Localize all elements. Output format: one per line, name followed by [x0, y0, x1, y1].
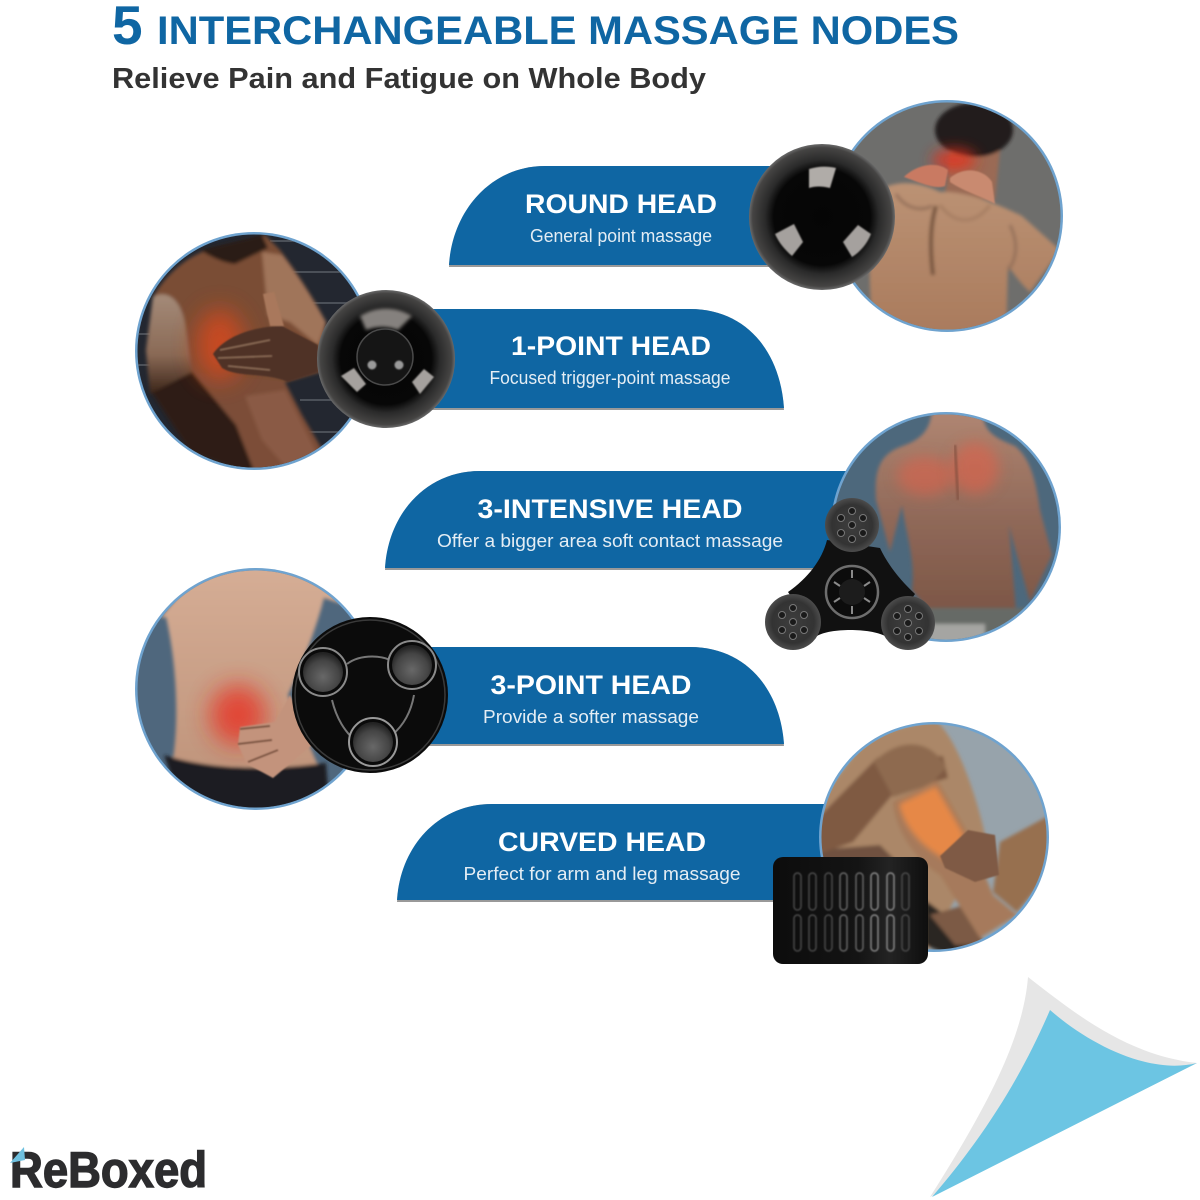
panel: 3-point head banner: 3-POINT HEAD: [490, 670, 692, 700]
top knob: [825, 498, 879, 552]
corner page curl: [930, 977, 1197, 1197]
logo: ReBoxed: [10, 1142, 207, 1198]
panel: 1-point head banner: 1-POINT HEAD: [511, 331, 711, 361]
photo: upper back pain: [828, 410, 1064, 648]
panel: 3-intensive head banner: Offer a bigger area soft contact massage: [437, 531, 783, 551]
panel: curved head banner: Perfect for arm and leg massage: [464, 864, 740, 884]
panel: 1-point head banner: Focused trigger-point massage: [490, 368, 730, 388]
icon: round massage head: [749, 144, 895, 290]
icon: 1-point massage head: [317, 290, 455, 428]
left knob: [765, 594, 821, 650]
right knob: [881, 596, 935, 650]
photo: arm and chest pain: [135, 232, 360, 470]
subtitle: Relieve Pain and Fatigue on Whole Body: [112, 63, 706, 95]
photo: leg pain: [819, 722, 1049, 952]
panel: curved head banner: [397, 804, 850, 902]
panel: round head banner: General point massage: [530, 226, 712, 246]
center ring: [826, 566, 878, 618]
photo: lower back pain: [135, 568, 354, 810]
icon: 3-point massage head: [292, 617, 448, 773]
panel: 1-point head banner: [400, 309, 784, 410]
panel: curved head banner: CURVED HEAD: [498, 827, 706, 857]
panel: 3-point head banner: [400, 647, 784, 746]
icon: 3-intensive massage head: [765, 498, 935, 650]
panel: 3-intensive head banner: [385, 471, 860, 570]
panel: 3-intensive head banner: 3-INTENSIVE HEAD: [478, 494, 742, 524]
panel: round head banner: ROUND HEAD: [525, 189, 717, 219]
icon: curved massage head: [773, 857, 928, 964]
panel: round head banner: [449, 166, 800, 267]
title: INTERCHANGEABLE MASSAGE NODES: [157, 9, 959, 53]
panel: 3-point head banner: Provide a softer massage: [483, 707, 699, 727]
photo: neck pain: [852, 100, 1063, 332]
